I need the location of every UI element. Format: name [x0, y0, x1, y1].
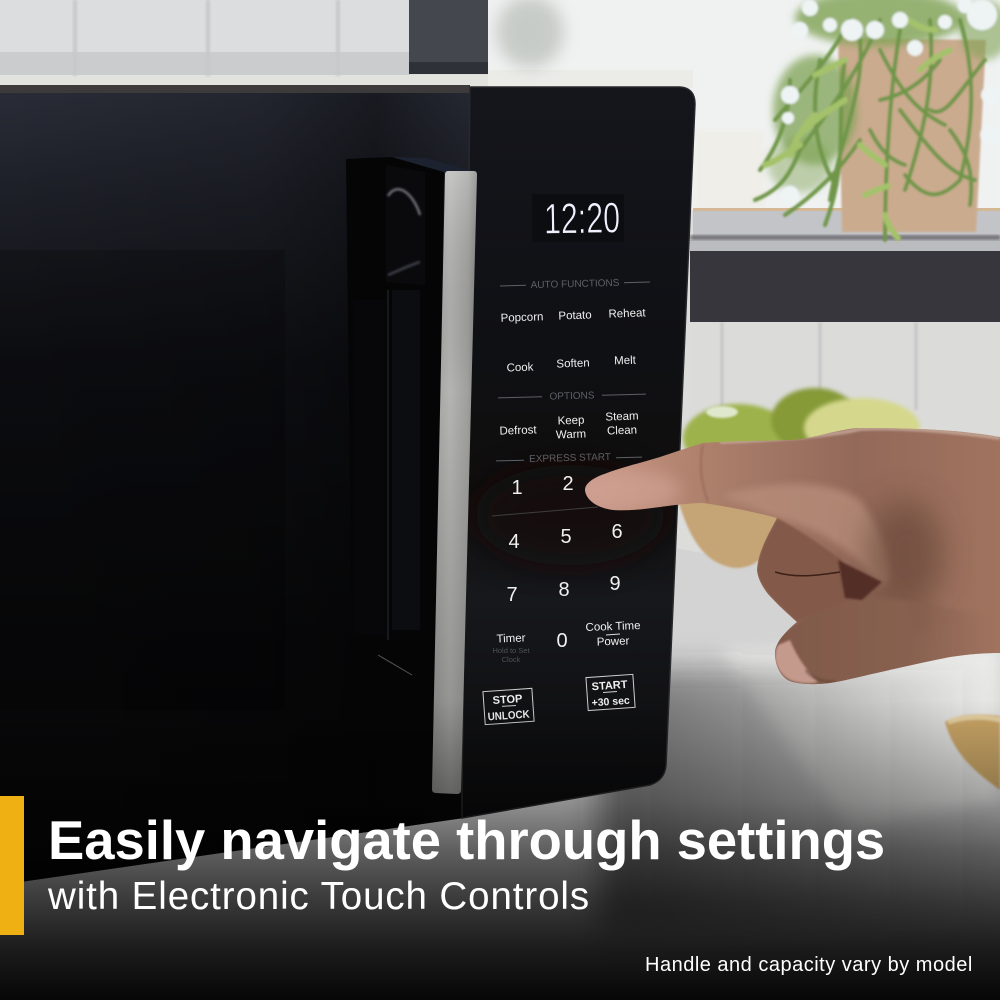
- number keys: 2: [562, 473, 574, 495]
- number keys: 9: [609, 573, 621, 595]
- options heading: [498, 389, 646, 404]
- display clock: 12:20: [544, 194, 620, 244]
- potted plant: [755, 0, 1000, 240]
- options heading: OPTIONS: [549, 390, 595, 403]
- auto functions heading: AUTO FUNCTIONS: [531, 278, 620, 291]
- start button: START: [591, 679, 628, 693]
- number keys: [506, 473, 623, 652]
- stop unlock button: UNLOCK: [487, 709, 530, 723]
- pocket between fingers: [838, 560, 882, 600]
- back of hand shadow: [867, 500, 943, 610]
- number keys: 5: [560, 526, 572, 548]
- thumbnail: [775, 640, 818, 683]
- auto functions heading: [500, 277, 650, 292]
- bottom gradient overlay: [0, 700, 1000, 1000]
- yellow accent bar: [0, 796, 24, 935]
- thumb: [775, 600, 972, 684]
- knuckle crease: [701, 445, 708, 502]
- control labels: [483, 277, 650, 725]
- control labels: Defrost: [499, 424, 538, 438]
- white sky gaps: [781, 0, 1000, 204]
- control labels: Cook: [506, 362, 534, 374]
- express start heading: [496, 451, 642, 466]
- finger crease: [775, 572, 840, 576]
- shelf: [690, 208, 1000, 322]
- trailing strands: [755, 20, 985, 240]
- stop unlock button: STOP: [492, 693, 523, 707]
- headline: Easily navigate through settings: [48, 810, 885, 871]
- control labels: Power: [597, 635, 630, 649]
- number keys: 0: [556, 630, 568, 652]
- subheading: with Electronic Touch Controls: [48, 875, 590, 918]
- finger underside light: [720, 484, 890, 585]
- control labels: Keep: [557, 415, 585, 427]
- fingertip highlight: [580, 470, 680, 510]
- control labels: Steam: [605, 410, 639, 424]
- control labels: Clock: [502, 655, 521, 664]
- window: [488, 0, 1000, 210]
- express start heading: EXPRESS START: [529, 452, 611, 465]
- control labels: Popcorn: [500, 311, 544, 325]
- stop unlock button: [483, 688, 534, 725]
- foliage mass: [768, 0, 1000, 193]
- start button: [586, 674, 635, 711]
- start button: +30 sec: [591, 695, 630, 709]
- disclaimer: Handle and capacity vary by model: [645, 954, 973, 976]
- control labels: Potato: [558, 309, 592, 323]
- number keys: 8: [558, 579, 570, 601]
- control labels: Soften: [556, 357, 590, 371]
- display clock: [532, 194, 624, 244]
- pot: [838, 38, 986, 232]
- control labels: Timer: [496, 632, 526, 646]
- food item on right: [945, 714, 1000, 790]
- number keys: 1: [511, 477, 523, 499]
- counter: [0, 545, 1000, 1000]
- bowl with green fruit: [678, 388, 920, 568]
- window frame column: [409, 0, 488, 74]
- control labels: Reheat: [608, 307, 647, 321]
- panel hand reflection: [505, 552, 634, 568]
- control labels: Melt: [614, 355, 637, 367]
- number keys: 4: [508, 531, 520, 553]
- hand base colour: [580, 420, 1000, 690]
- stainless handle bar: [432, 171, 477, 794]
- door handle: [338, 157, 477, 795]
- control panel body: [462, 87, 695, 818]
- curled middle finger: [757, 518, 853, 622]
- control labels: Cook Time: [585, 620, 641, 634]
- finger top skin highlight: [720, 428, 1000, 442]
- control labels: Warm: [556, 428, 586, 442]
- microwave door: [0, 85, 470, 885]
- number keys: 6: [611, 521, 623, 543]
- control labels: Clean: [607, 424, 637, 438]
- number keys: 7: [506, 584, 518, 606]
- control labels: Hold to Set: [492, 646, 530, 655]
- hand pointing: [580, 420, 1000, 690]
